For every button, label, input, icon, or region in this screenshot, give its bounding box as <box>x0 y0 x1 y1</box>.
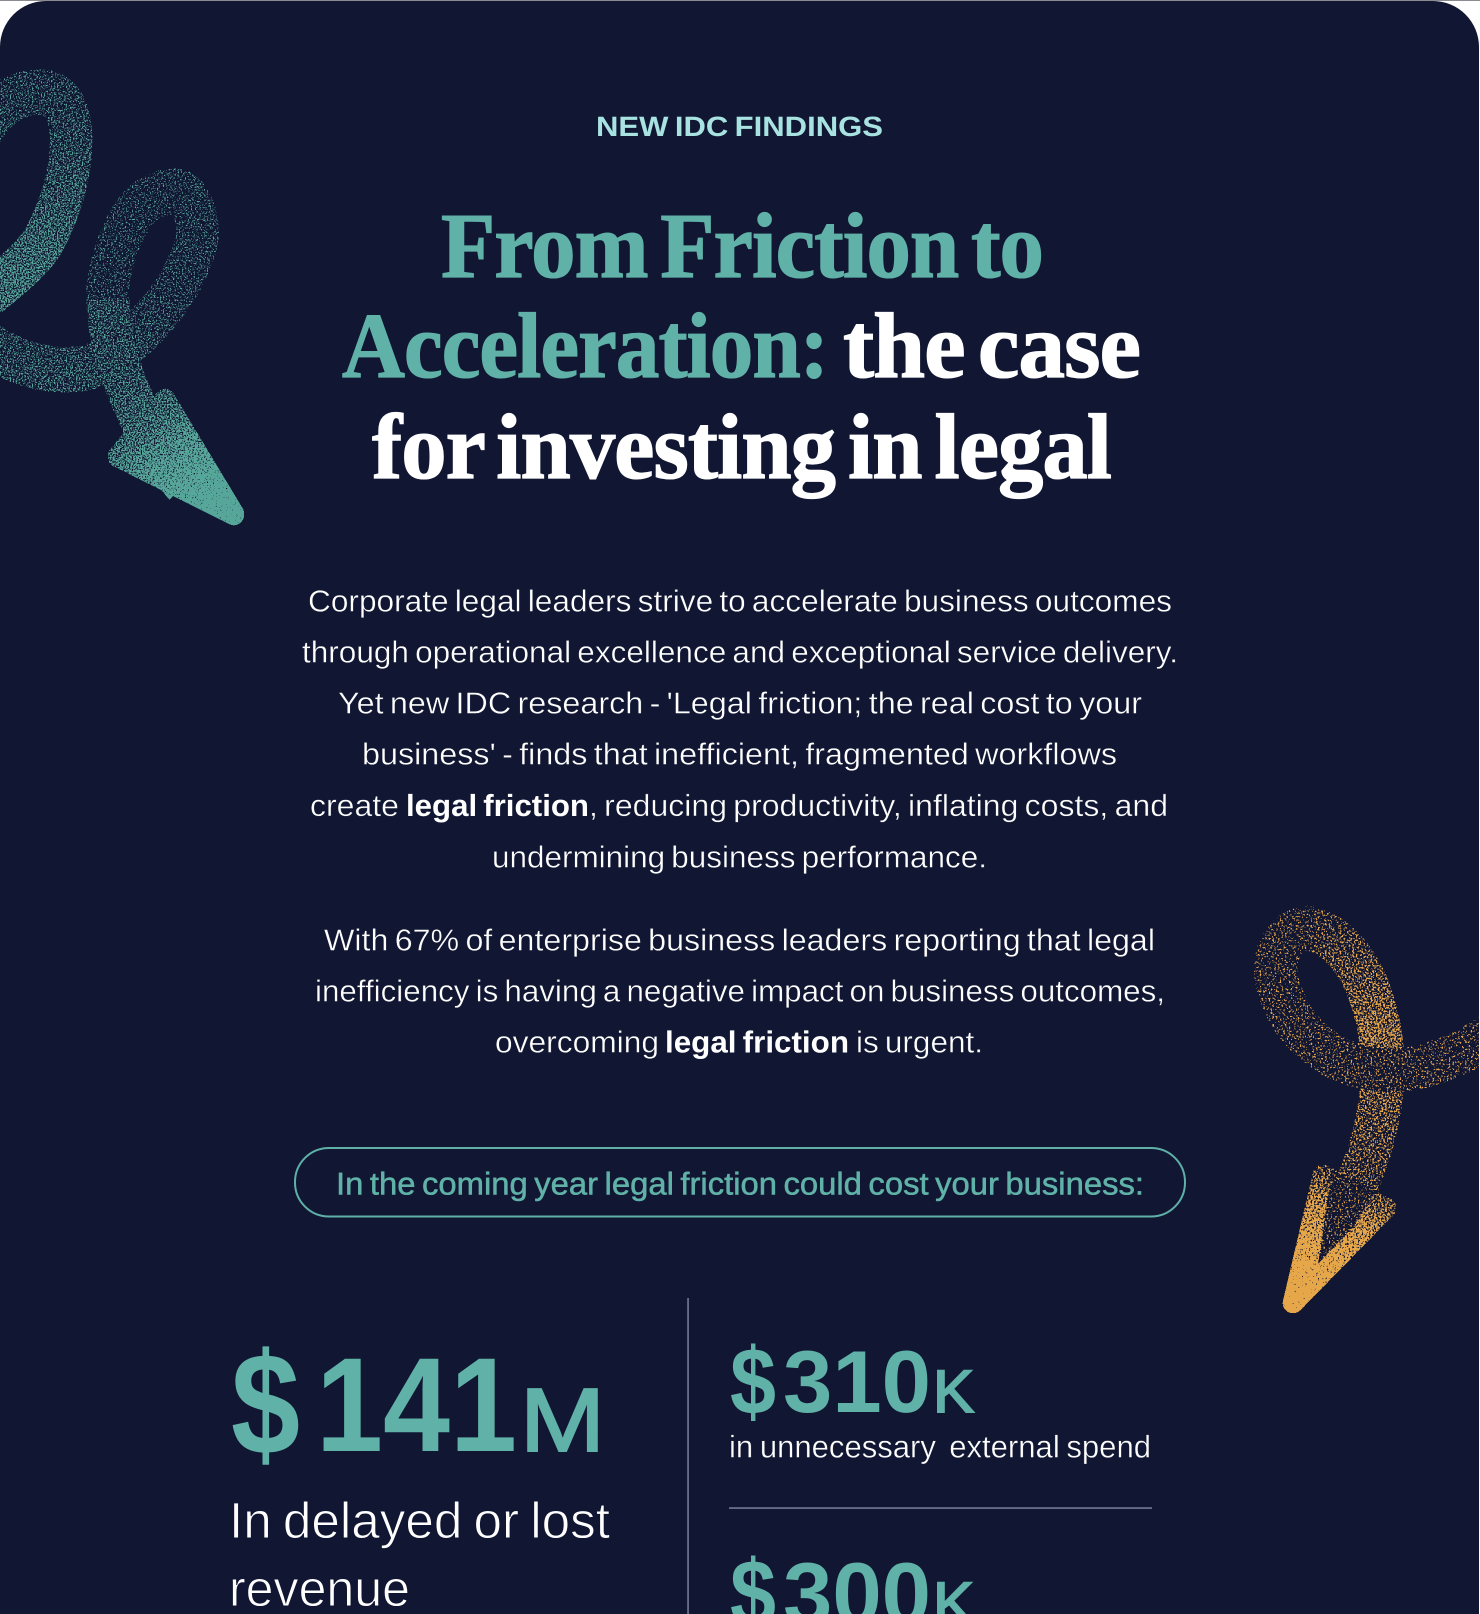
title: for investing in legal <box>372 396 1111 499</box>
stat: $310K in unnecessary external spend: K <box>933 1358 974 1425</box>
second paragraph: is urgent. <box>856 1026 983 1060</box>
stat: $141M in delayed or lost revenue: 141 <box>316 1331 517 1480</box>
icon: teal scribble arrow <box>0 92 234 514</box>
vertical divider <box>687 1298 689 1614</box>
stat: $310K in unnecessary external spend: 310 <box>783 1332 931 1431</box>
second paragraph: overcoming <box>495 1026 659 1060</box>
second paragraph: inefficiency is having a negative impact on business outcomes, <box>315 975 1165 1009</box>
intro paragraph: , reducing productivity, inflating costs, and <box>589 789 1168 823</box>
callout pill: In the coming year legal friction could cost your business: <box>336 1165 1144 1201</box>
stat: $141M in delayed or lost revenue: M <box>520 1371 605 1471</box>
horizontal divider <box>729 1507 1152 1509</box>
stat: $141M in delayed or lost revenue: $ <box>231 1323 300 1485</box>
stat: $310K in unnecessary external spend <box>729 1329 1151 1464</box>
title: Acceleration: <box>342 295 828 398</box>
intro paragraph: Yet new IDC research - 'Legal friction; the real cost to your <box>338 686 1142 720</box>
callout pill <box>295 1148 1185 1216</box>
intro paragraph: create <box>310 789 399 823</box>
stat: $141M in delayed or lost revenue: In delayed or lost <box>229 1492 610 1549</box>
title: the case <box>843 295 1140 398</box>
intro paragraph <box>302 585 1178 874</box>
icon: orange scribble arrow <box>1276 927 1480 1303</box>
stat: $310K in unnecessary external spend: in unnecessary external spend <box>729 1428 1151 1464</box>
stat: $300K <box>730 1541 974 1614</box>
stat: $310K in unnecessary external spend: $ <box>730 1329 776 1435</box>
stat: $141M in delayed or lost revenue <box>229 1323 610 1614</box>
second paragraph: legal friction <box>665 1026 849 1060</box>
eyebrow: NEW IDC FINDINGS: NEW IDC FINDINGS <box>596 111 883 142</box>
title: From Friction to <box>441 195 1043 298</box>
second paragraph: With 67% of enterprise business leaders reporting that legal <box>324 924 1155 958</box>
second paragraph <box>315 924 1165 1060</box>
title <box>342 195 1140 499</box>
intro paragraph: legal friction <box>406 789 589 823</box>
intro paragraph: business' - finds that inefficient, fragmented workflows <box>362 738 1117 772</box>
intro paragraph: through operational excellence and exceptional service delivery. <box>302 636 1178 670</box>
intro paragraph: Corporate legal leaders strive to accelerate business outcomes <box>308 585 1172 619</box>
intro paragraph: undermining business performance. <box>492 840 987 874</box>
